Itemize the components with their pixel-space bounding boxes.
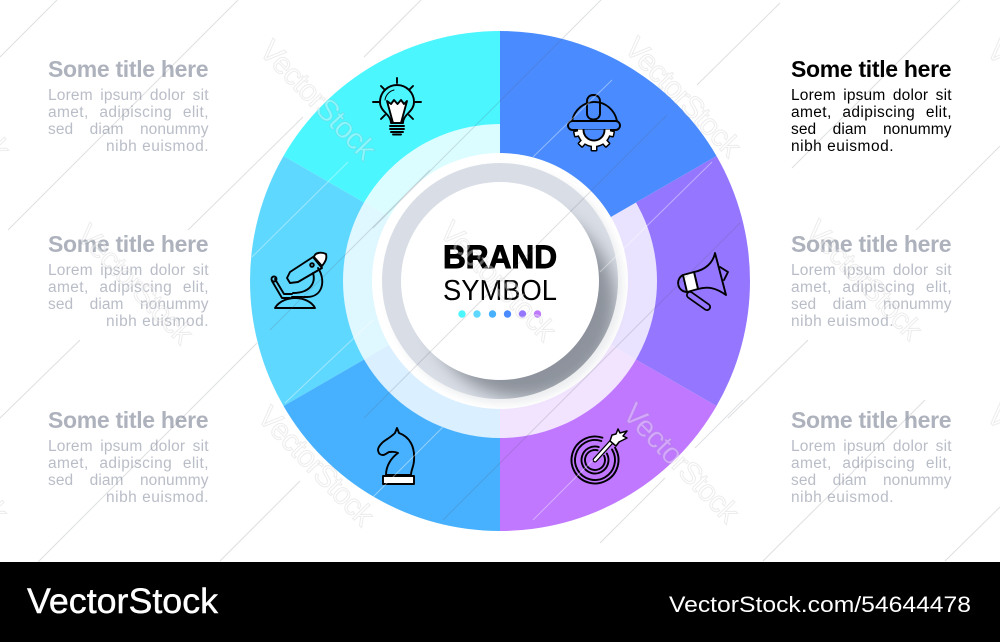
segment: right purple — [500, 156, 750, 406]
icon: hard hat with gear — [568, 95, 620, 152]
watermarks: VectorStock — [70, 218, 200, 351]
segment: left light blue — [250, 156, 500, 406]
symbol word: SYMBOL — [443, 275, 557, 307]
segment: top right blue — [500, 31, 716, 281]
brand word: BRAND — [443, 239, 557, 275]
text block: middle left — [48, 231, 209, 330]
text block: bottom left: amet, adipiscing elit, — [48, 455, 208, 472]
text block: middle left: Lorem ipsum dolor sit — [48, 262, 209, 279]
text block: bottom right — [791, 407, 952, 506]
icon: light bulb — [373, 78, 421, 134]
text block: middle left: nibh euismod. — [106, 313, 208, 330]
text block: top right active: Some title here — [791, 56, 952, 82]
text block: bottom left: nibh euismod. — [106, 489, 208, 506]
text block: bottom right: Some title here — [791, 407, 952, 433]
text block: bottom right: Lorem ipsum dolor sit — [791, 438, 952, 455]
text block: top left: nibh euismod. — [106, 138, 208, 155]
text block: middle right: Some title here — [791, 231, 952, 257]
center badge — [372, 153, 628, 409]
text block: middle right: amet, adipiscing elit, — [791, 279, 952, 296]
text block: top left: Some title here — [48, 56, 208, 82]
text block: middle right: sed diam nonummy — [791, 296, 952, 313]
text block: bottom left — [48, 407, 209, 506]
text block: bottom left: Lorem ipsum dolor sit — [48, 438, 209, 455]
watermarks: VectorStock — [251, 400, 381, 533]
donut chart with six segments — [250, 31, 750, 531]
text block: bottom right: nibh euismod. — [791, 489, 894, 506]
text block: top left — [48, 56, 209, 155]
segment: bottom right violet — [500, 281, 716, 531]
watermarks: VectorStock — [253, 34, 383, 167]
text block: middle right: Lorem ipsum dolor sit — [791, 262, 952, 279]
text block: top left: amet, adipiscing elit, — [48, 104, 208, 121]
icon: microscope — [272, 253, 326, 308]
text block: top right active: amet, adipiscing elit, — [791, 104, 952, 121]
text block: bottom right: sed diam nonummy — [791, 472, 952, 489]
text block: bottom left: sed diam nonummy — [48, 472, 209, 489]
icon: megaphone — [678, 253, 728, 307]
icon: target with arrow — [563, 428, 627, 492]
segment: bottom left blue — [284, 281, 500, 531]
watermarks: VectorStock — [433, 215, 563, 348]
icon: chess knight — [378, 428, 414, 484]
watermarks: VectorStock — [799, 214, 929, 347]
text block: middle left: amet, adipiscing elit, — [48, 279, 208, 296]
watermarks: VectorStock — [618, 31, 748, 164]
pale inner ring — [343, 124, 657, 438]
text block: bottom left: Some title here — [48, 407, 208, 433]
text block: middle left: Some title here — [48, 231, 208, 257]
watermarks: VectorStock — [616, 397, 746, 530]
text block: top right active: sed diam nonummy — [791, 121, 952, 138]
text block: top right active: Lorem ipsum dolor sit — [791, 87, 952, 104]
segment: top left cyan — [284, 31, 500, 281]
text block: middle right — [791, 231, 952, 330]
text block: top right active — [791, 56, 952, 155]
text block: top left: sed diam nonummy — [48, 121, 209, 138]
watermarks — [0, 31, 1000, 533]
text block: middle left: sed diam nonummy — [48, 296, 209, 313]
six coloured dots — [458, 310, 541, 318]
footer logo text: VectorStock — [27, 582, 219, 621]
footer bar — [0, 562, 1000, 642]
footer image id: VectorStock.com/54644478 — [669, 592, 971, 617]
text block: top left: Lorem ipsum dolor sit — [48, 87, 209, 104]
text block: top right active: nibh euismod. — [791, 138, 894, 155]
text block: bottom right: amet, adipiscing elit, — [791, 455, 952, 472]
text block: middle right: nibh euismod. — [791, 313, 894, 330]
